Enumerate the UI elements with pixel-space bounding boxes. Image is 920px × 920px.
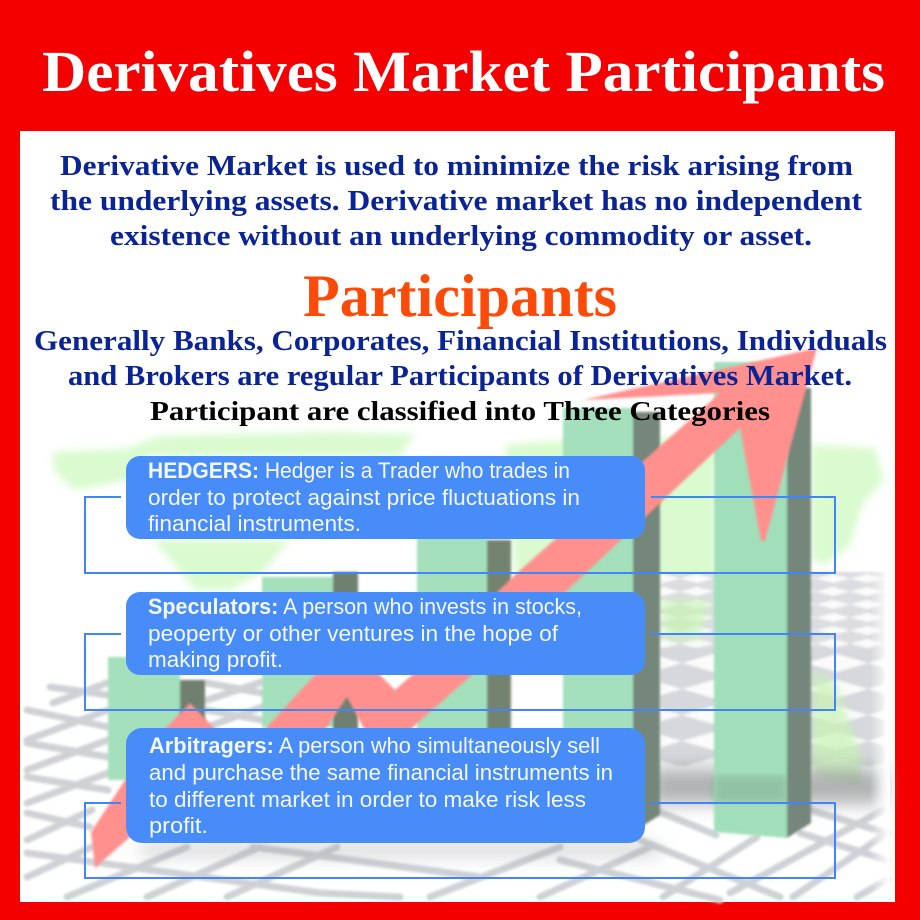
background image: chart with arrow	[27, 348, 890, 902]
participants heading: Participants	[303, 263, 617, 329]
floor grid, right side	[660, 572, 885, 766]
arbitragers box	[126, 728, 645, 843]
arbitragers text: to different market in order to make risk less	[149, 787, 586, 812]
participants description: and Brokers are regular Participants of Derivatives Market.	[68, 361, 852, 392]
arbitragers item	[85, 728, 835, 878]
participants description: Generally Banks, Corporates, Financial Institutions, Individuals	[34, 326, 887, 357]
speculators item	[85, 592, 835, 710]
participants description	[34, 326, 887, 392]
intro text: existence without an underlying commodity or asset.	[110, 221, 812, 252]
intro text: the underlying assets. Derivative market has no independent	[50, 186, 863, 217]
arbitragers text: and purchase the same financial instruments in	[149, 760, 613, 785]
arbitragers bracket	[85, 803, 835, 878]
floor shadow	[140, 768, 885, 855]
arbitragers text	[149, 733, 613, 838]
rising red arrow	[91, 348, 817, 868]
title: Derivatives Market Participants	[42, 39, 885, 104]
floor grid, left side	[27, 682, 887, 900]
hedgers bracket	[85, 497, 835, 573]
speculators text: Speculators: A person who invests in stocks,	[148, 594, 582, 619]
intro text: Derivative Market is used to minimize the risk arising from	[60, 151, 853, 182]
arbitragers text: profit.	[149, 813, 208, 838]
intro text	[50, 151, 863, 252]
light green map over grid	[660, 600, 862, 785]
speculators bracket	[85, 634, 835, 710]
speculators text: making profit.	[148, 647, 283, 672]
hedgers text: HEDGERS: Hedger is a Trader who trades in	[148, 458, 570, 483]
hedgers text: order to protect against price fluctuations in	[148, 485, 580, 510]
speculators box	[126, 592, 645, 675]
speculators text: peoperty or other ventures in the hope of	[148, 621, 559, 646]
hedgers item	[85, 456, 835, 573]
hedgers box	[126, 456, 645, 539]
categories subheading: Participant are classified into Three Categories	[150, 396, 770, 426]
hedgers text: financial instruments.	[148, 511, 361, 536]
right edge fade	[870, 560, 890, 902]
chart bars	[108, 362, 811, 838]
world map	[53, 430, 884, 640]
arbitragers text: Arbitragers: A person who simultaneously sell	[149, 733, 600, 758]
white content panel	[20, 131, 895, 902]
hedgers text	[148, 458, 580, 536]
speculators text	[148, 594, 582, 672]
